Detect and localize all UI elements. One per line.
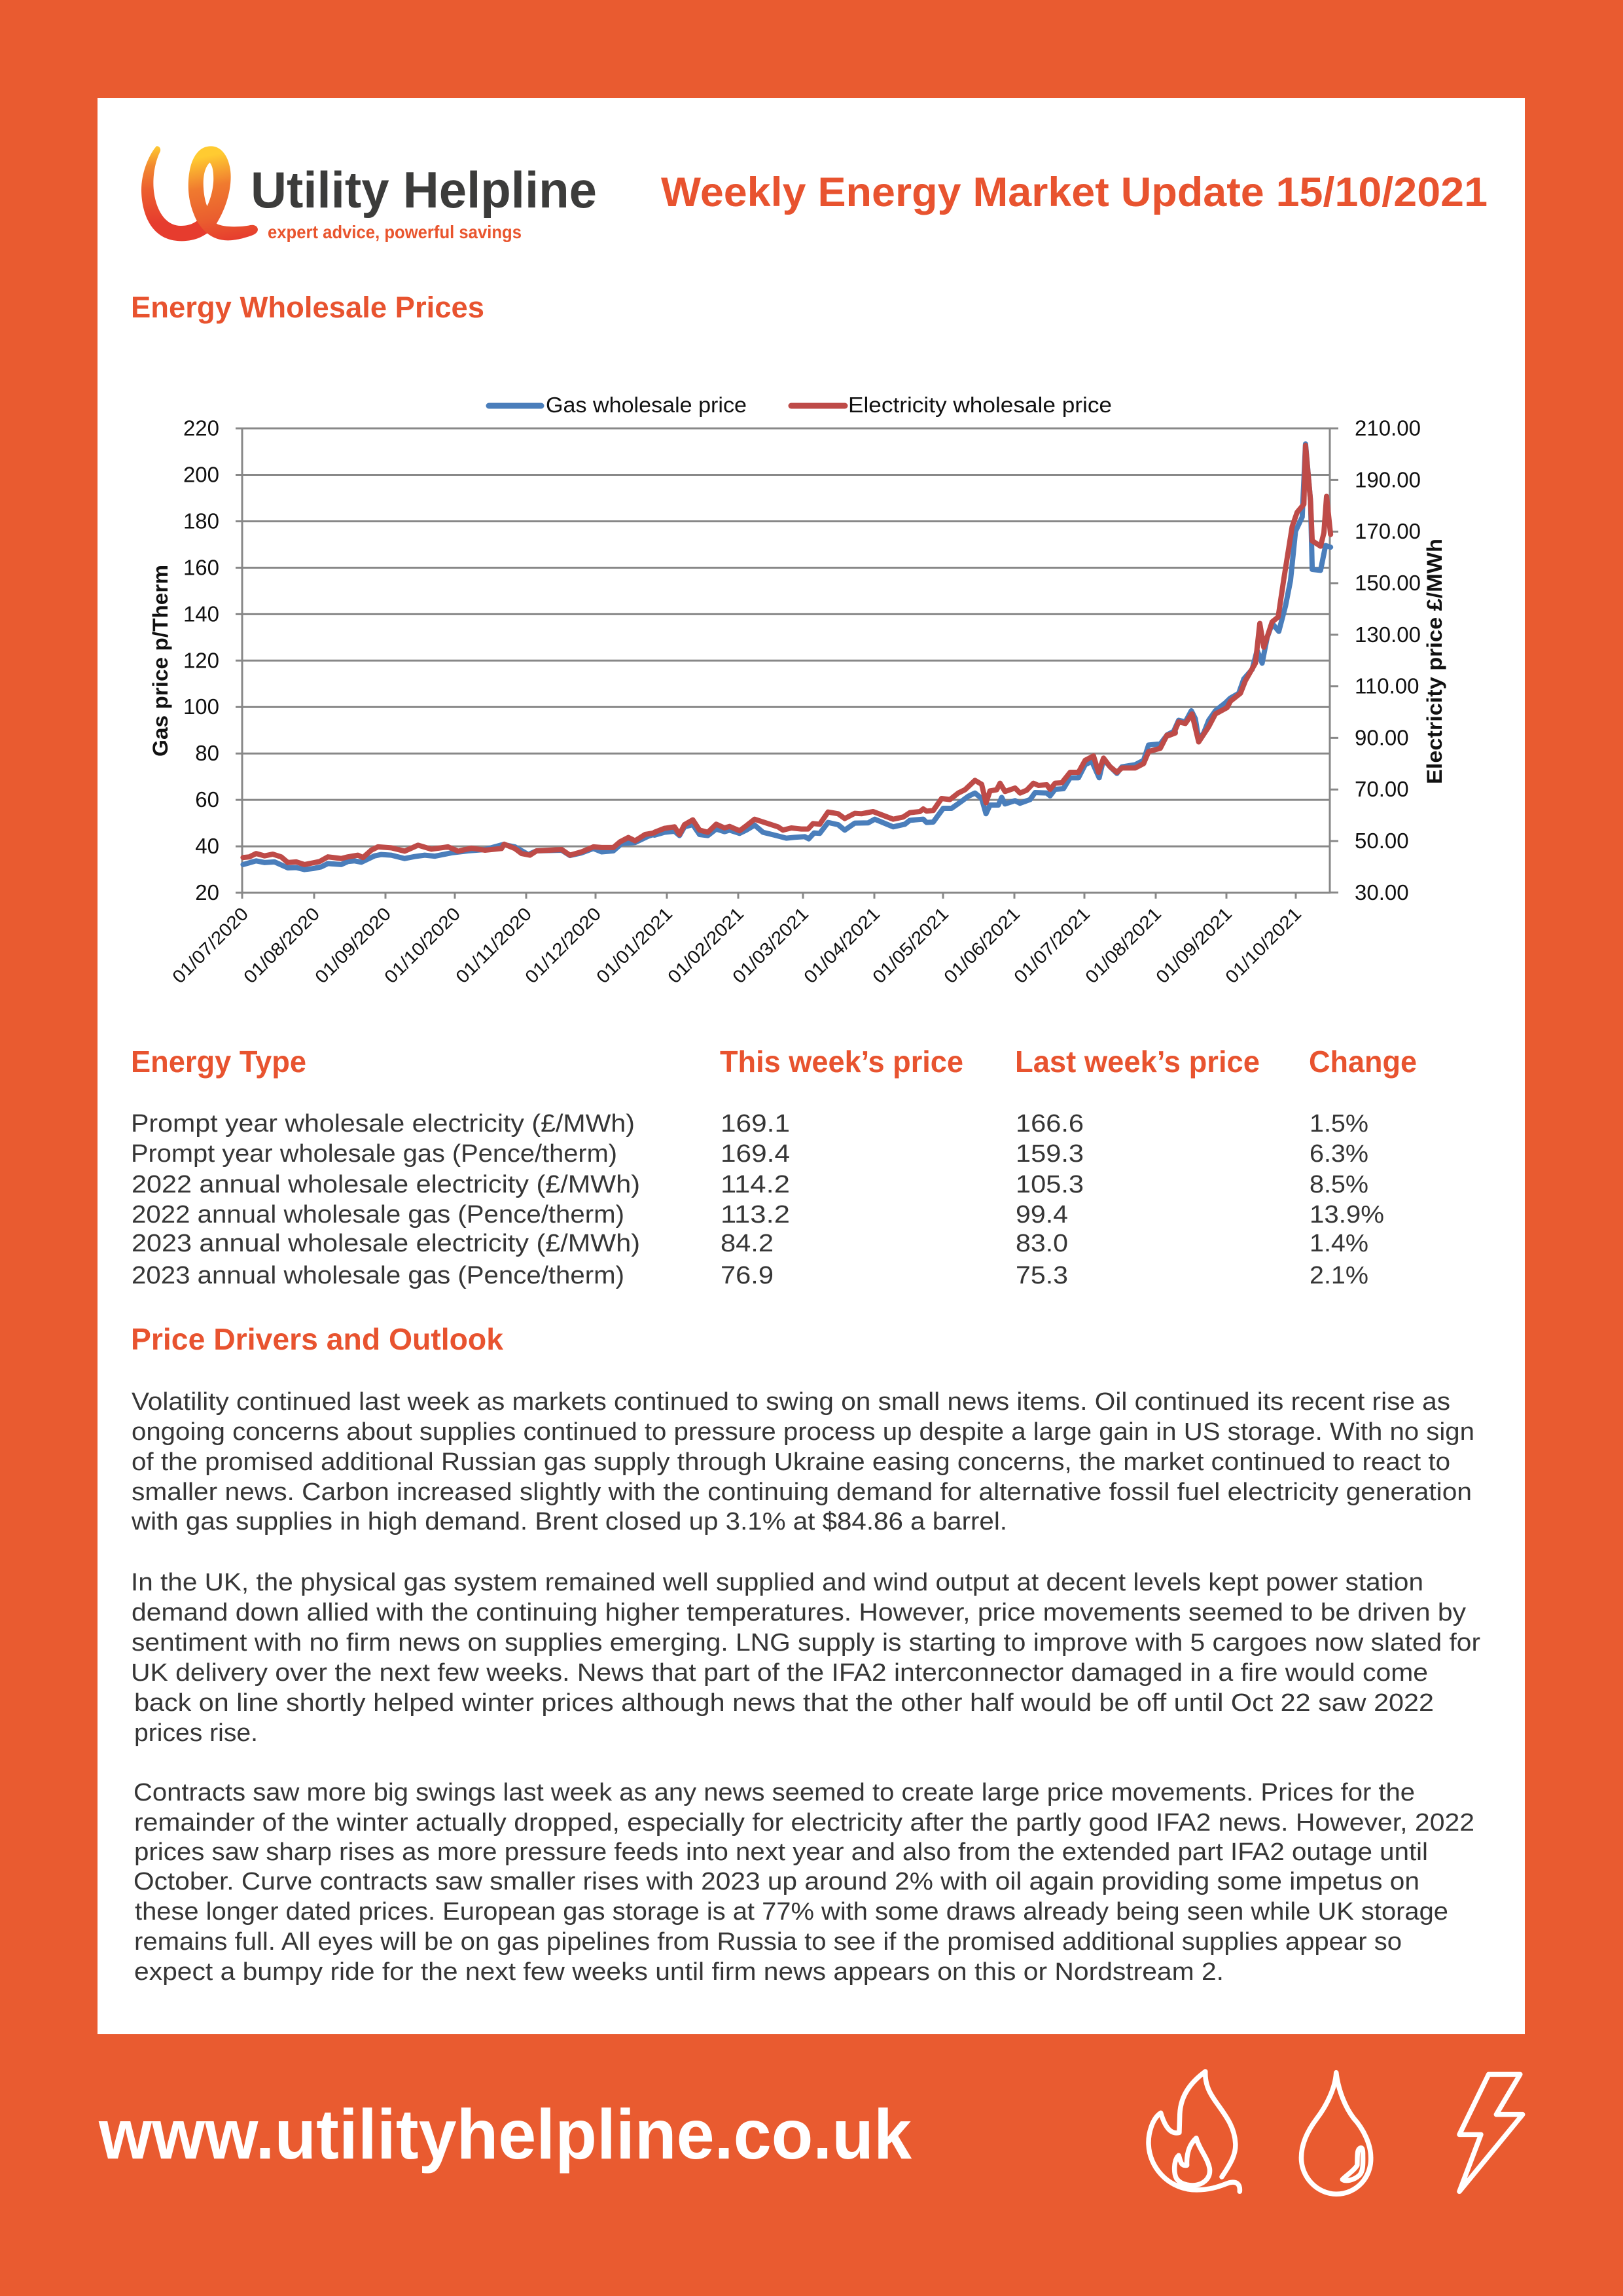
text block: paragraph 2 (131, 1569, 1480, 1747)
x axis date labels: 01/08/2021 (1081, 903, 1165, 987)
row: prompt year gas: 169.4 (721, 1140, 790, 1168)
text block: paragraph 3: expect a bumpy ride for the next few weeks until firm news appears on this or Nordstream 2. (134, 1958, 1224, 1986)
legend: Electricity wholesale price (848, 393, 1112, 417)
left axis labels: 220 (183, 416, 219, 440)
text block: paragraph 3: these longer dated prices. European gas storage is at 77% with some draws already being seen while UK storage (135, 1898, 1448, 1926)
text block: paragraph 1: Volatility continued last week as markets continued to swing on small news items. Oil continued its recent rise as (132, 1388, 1450, 1416)
row: 2023 electricity (132, 1230, 1368, 1257)
x axis date labels: 01/07/2020 (168, 903, 252, 987)
x axis date labels: 01/02/2021 (664, 903, 747, 987)
row: 2023 gas: 76.9 (721, 1262, 774, 1289)
row: prompt year gas (131, 1140, 1368, 1168)
right axis title: Electricity price £/MWh (1423, 539, 1446, 784)
x axis date labels: 01/12/2020 (521, 903, 605, 987)
left axis labels: 80 (195, 741, 219, 765)
row: 2023 electricity: 2023 annual wholesale electricity (£/MWh) (132, 1230, 640, 1257)
row: 2022 gas: 99.4 (1016, 1201, 1068, 1229)
text block: paragraph 3: remains full. All eyes will be on gas pipelines from Russia to see if the promised additional supplies appear so (134, 1928, 1402, 1956)
row: prompt year gas: 6.3% (1310, 1140, 1368, 1168)
left axis labels: 200 (183, 462, 219, 487)
row: 2022 gas: 13.9% (1310, 1201, 1384, 1229)
text block: paragraph 3 (134, 1779, 1474, 1986)
left axis labels: 140 (183, 601, 219, 626)
x axis date labels: 01/09/2021 (1152, 903, 1236, 987)
x axis date labels: 01/11/2020 (452, 903, 535, 987)
right axis labels: 90.00 (1355, 725, 1409, 749)
left axis labels: 180 (183, 509, 219, 533)
title: Weekly Energy Market Update 15/10/2021 (661, 170, 1488, 215)
text block: paragraph 2: In the UK, the physical gas system remained well supplied and wind output at decent levels kept power station (131, 1569, 1423, 1596)
text block: paragraph 2: back on line shortly helped winter prices although news that the other half would be off until Oct 22 saw 2022 (134, 1689, 1434, 1717)
row: 2022 electricity (132, 1171, 1368, 1198)
row: prompt year electricity: 1.5% (1310, 1110, 1368, 1138)
right axis labels: 210.00 (1355, 416, 1421, 440)
row: prompt year electricity: Prompt year wholesale electricity (£/MWh) (131, 1110, 635, 1138)
left axis labels (183, 416, 219, 905)
price table (131, 1045, 1417, 1289)
row: 2023 gas: 2023 annual wholesale gas (Pence/therm) (132, 1262, 624, 1289)
table header: Energy Type (131, 1045, 306, 1079)
left axis labels: 100 (183, 694, 219, 719)
row: 2022 electricity: 114.2 (721, 1171, 790, 1198)
x axis date labels: 01/06/2021 (940, 903, 1024, 987)
icon: lightning bolt (1459, 2074, 1523, 2191)
right axis labels: 150.00 (1355, 571, 1421, 595)
logo tagline: expert advice, powerful savings (268, 222, 522, 242)
row: 2023 gas: 2.1% (1310, 1262, 1368, 1289)
text block: paragraph 1: of the promised additional Russian gas supply through Ukraine easing concerns, the market continued to react to (132, 1448, 1450, 1476)
left axis labels: 20 (195, 880, 219, 905)
series: gas wholesale price (243, 444, 1330, 870)
row: 2022 gas: 113.2 (721, 1201, 790, 1229)
left axis labels: 120 (183, 648, 219, 672)
text block: paragraph 1: ongoing concerns about supplies continued to pressure process up despite a large gain in US storage. With no sign (132, 1418, 1474, 1446)
right axis labels: 30.00 (1355, 880, 1409, 905)
x axis date labels: 01/10/2020 (380, 903, 464, 987)
text block: paragraph 1: smaller news. Carbon increased slightly with the continuing demand for alternative fossil fuel electricity generation (132, 1479, 1472, 1506)
logo wordmark: Utility Helpline (251, 161, 597, 219)
x axis date labels: 01/01/2021 (592, 903, 676, 987)
footer website address: www.utilityhelpline.co.uk (98, 2094, 912, 2174)
legend: Gas wholesale price (546, 393, 747, 417)
table header: Last week’s price (1015, 1045, 1260, 1079)
row: 2022 gas: 2022 annual wholesale gas (Pence/therm) (132, 1201, 624, 1229)
right axis labels (1355, 416, 1421, 905)
x axis date labels (168, 903, 1305, 987)
row: 2022 electricity: 8.5% (1310, 1171, 1368, 1198)
left axis labels: 160 (183, 555, 219, 579)
right axis labels: 50.00 (1355, 829, 1409, 853)
row: prompt year electricity: 166.6 (1016, 1110, 1084, 1138)
icon: water drop (1301, 2073, 1371, 2194)
text block: paragraph 2: sentiment with no firm news on supplies emerging. LNG supply is starting to improve with 5 cargoes now slated for (132, 1629, 1480, 1657)
heading: Energy Wholesale Prices: Energy Wholesale Prices (131, 291, 484, 324)
right axis labels: 130.00 (1355, 622, 1421, 647)
row: prompt year electricity: 169.1 (721, 1110, 790, 1138)
x axis date labels: 01/08/2020 (240, 903, 323, 987)
series: electricity wholesale price (243, 446, 1330, 865)
white content panel (98, 98, 1525, 2034)
table header: This week’s price (720, 1045, 963, 1079)
x axis date labels: 01/05/2021 (868, 903, 952, 987)
row: 2023 electricity: 1.4% (1310, 1230, 1368, 1257)
row: prompt year gas: 159.3 (1016, 1140, 1084, 1168)
text block: paragraph 3: remainder of the winter actually dropped, especially for electricity after the partly good IFA2 news. However, 2022 (134, 1809, 1474, 1837)
legend (489, 393, 1112, 417)
text block: paragraph 2: prices rise. (134, 1719, 258, 1747)
right axis labels: 110.00 (1355, 674, 1419, 698)
text block: paragraph 2: UK delivery over the next few weeks. News that part of the IFA2 interconnector damaged in a fire would come (131, 1659, 1428, 1687)
x axis date labels: 01/07/2021 (1010, 903, 1094, 987)
x axis date labels: 01/10/2021 (1221, 903, 1305, 987)
text block: paragraph 3: prices saw sharp rises as more pressure feeds into next year and also from the extended part IFA2 outage until (134, 1839, 1428, 1866)
table header: Change (1309, 1045, 1417, 1079)
right axis labels: 170.00 (1355, 519, 1421, 543)
text block: paragraph 2: demand down allied with the continuing higher temperatures. However, price movements seemed to be driven by (132, 1599, 1466, 1626)
row: 2023 gas: 75.3 (1016, 1262, 1068, 1289)
row: prompt year gas: Prompt year wholesale gas (Pence/therm) (131, 1140, 617, 1168)
icon: logo swoosh (141, 146, 258, 241)
text block: paragraph 3: October. Curve contracts saw smaller rises with 2023 up around 2% with oil again providing some impetus on (134, 1868, 1419, 1895)
row: 2022 gas (132, 1201, 1384, 1229)
left axis labels: 40 (195, 834, 219, 858)
line chart: gas and electricity wholesale prices (149, 393, 1446, 987)
row: 2022 electricity: 105.3 (1016, 1171, 1084, 1198)
icon: flame (1149, 2072, 1240, 2191)
row: 2023 electricity: 84.2 (721, 1230, 774, 1257)
text block: paragraph 1: with gas supplies in high demand. Brent closed up 3.1% at $84.86 a barrel. (131, 1508, 1007, 1535)
heading: Price Drivers and Outlook: Price Drivers and Outlook (131, 1322, 503, 1356)
row: prompt year electricity (131, 1110, 1368, 1138)
left axis title: Gas price p/Therm (149, 565, 172, 757)
table header (131, 1045, 1417, 1079)
right axis labels: 70.00 (1355, 777, 1409, 801)
logo: Utility Helpline (141, 146, 597, 242)
text block: paragraph 1 (131, 1388, 1474, 1535)
left axis labels: 60 (195, 787, 219, 812)
x axis date labels: 01/04/2021 (800, 903, 883, 987)
row: 2023 electricity: 83.0 (1016, 1230, 1068, 1257)
row: 2022 electricity: 2022 annual wholesale electricity (£/MWh) (132, 1171, 640, 1198)
row: 2023 gas (132, 1262, 1368, 1289)
text block: paragraph 3: Contracts saw more big swings last week as any news seemed to create large price movements. Prices for the (134, 1779, 1415, 1806)
right axis labels: 190.00 (1355, 467, 1421, 492)
x axis date labels: 01/03/2021 (728, 903, 812, 987)
x axis date labels: 01/09/2020 (311, 903, 395, 987)
